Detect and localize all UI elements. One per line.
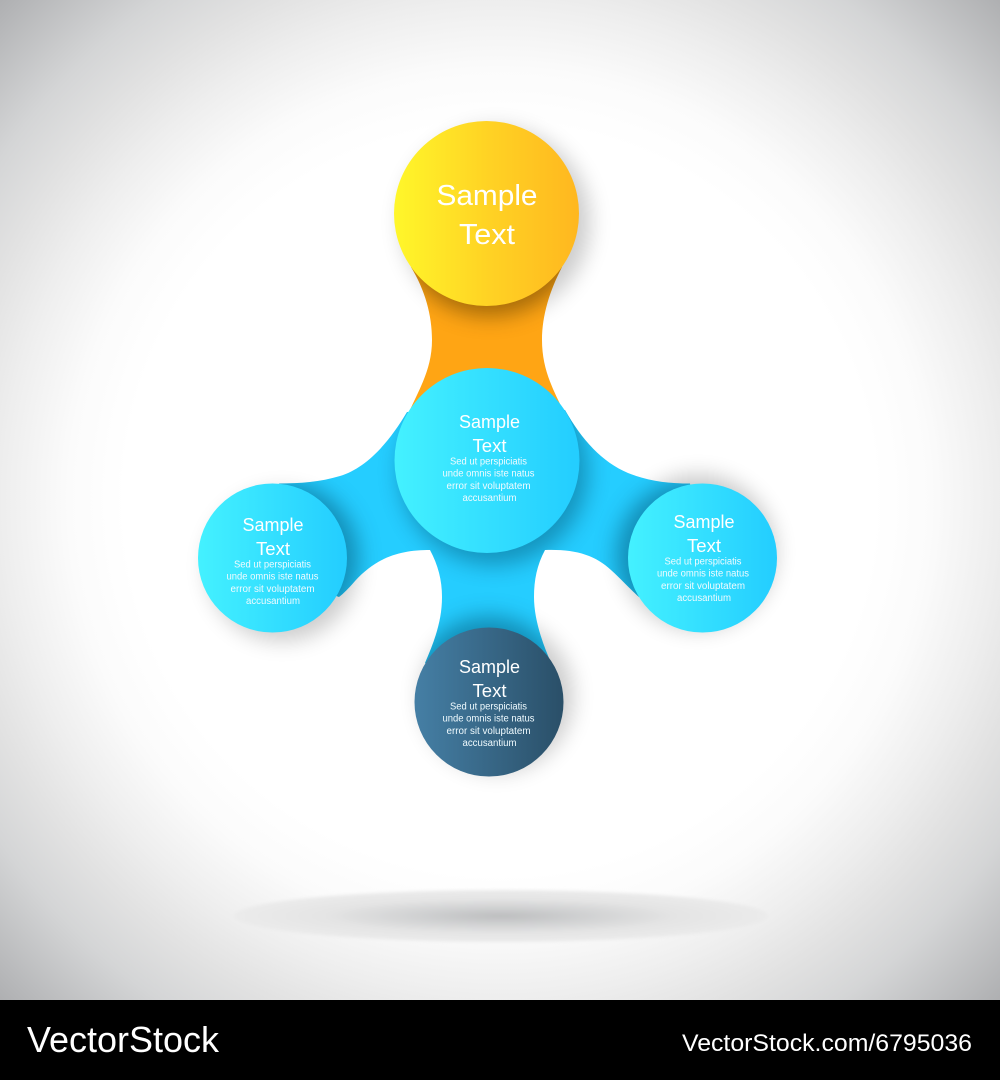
circle: right: unde omnis iste natus <box>657 568 749 580</box>
orange connector <box>410 267 562 410</box>
floor shadow <box>234 890 768 942</box>
circle: left <box>198 484 347 632</box>
circle: right: Text <box>687 536 721 556</box>
circle: left: accusantium <box>246 596 300 607</box>
circle: bottom dark <box>414 628 564 776</box>
circle: right: Sample <box>674 512 734 532</box>
circle: right: accusantium <box>677 593 731 604</box>
circle: centre <box>394 368 580 553</box>
circle: left: Sample <box>242 515 304 535</box>
circle: centre: accusantium <box>462 493 516 504</box>
circle: centre: Sed ut perspiciatis <box>450 456 527 468</box>
circle: right: error sit voluptatem <box>661 581 745 592</box>
circle: top yellow: Sample <box>436 180 538 212</box>
circle: bottom dark: error sit voluptatem <box>446 726 530 737</box>
circle: left: Sed ut perspiciatis <box>234 560 311 570</box>
circle: right <box>628 484 777 632</box>
circle: bottom dark: Text <box>472 681 506 701</box>
circle: centre: error sit voluptatem <box>446 481 530 492</box>
circle: centre: Text <box>472 436 506 456</box>
footer url: VectorStock.com/6795036 <box>682 1030 972 1057</box>
circle: top yellow: Text <box>459 219 515 251</box>
circle: left: unde omnis iste natus <box>226 572 318 582</box>
circle: bottom dark: accusantium <box>462 738 516 749</box>
circle: right: Sed ut perspiciatis <box>664 556 742 568</box>
footer bar <box>0 1000 1000 1080</box>
blue connector <box>279 410 690 664</box>
circle shadows on background <box>207 128 775 772</box>
circle: centre: unde omnis iste natus <box>442 468 534 480</box>
circle: top yellow <box>394 121 579 306</box>
circle: bottom dark: unde omnis iste natus <box>442 714 534 724</box>
footer logo: VectorStock <box>27 1019 220 1060</box>
circle: left: Text <box>256 539 290 559</box>
circle: bottom dark: Sample <box>459 657 520 677</box>
circle: bottom dark: Sed ut perspiciatis <box>450 702 527 712</box>
circle: centre: Sample <box>459 412 520 432</box>
circle: left: error sit voluptatem <box>230 584 314 595</box>
